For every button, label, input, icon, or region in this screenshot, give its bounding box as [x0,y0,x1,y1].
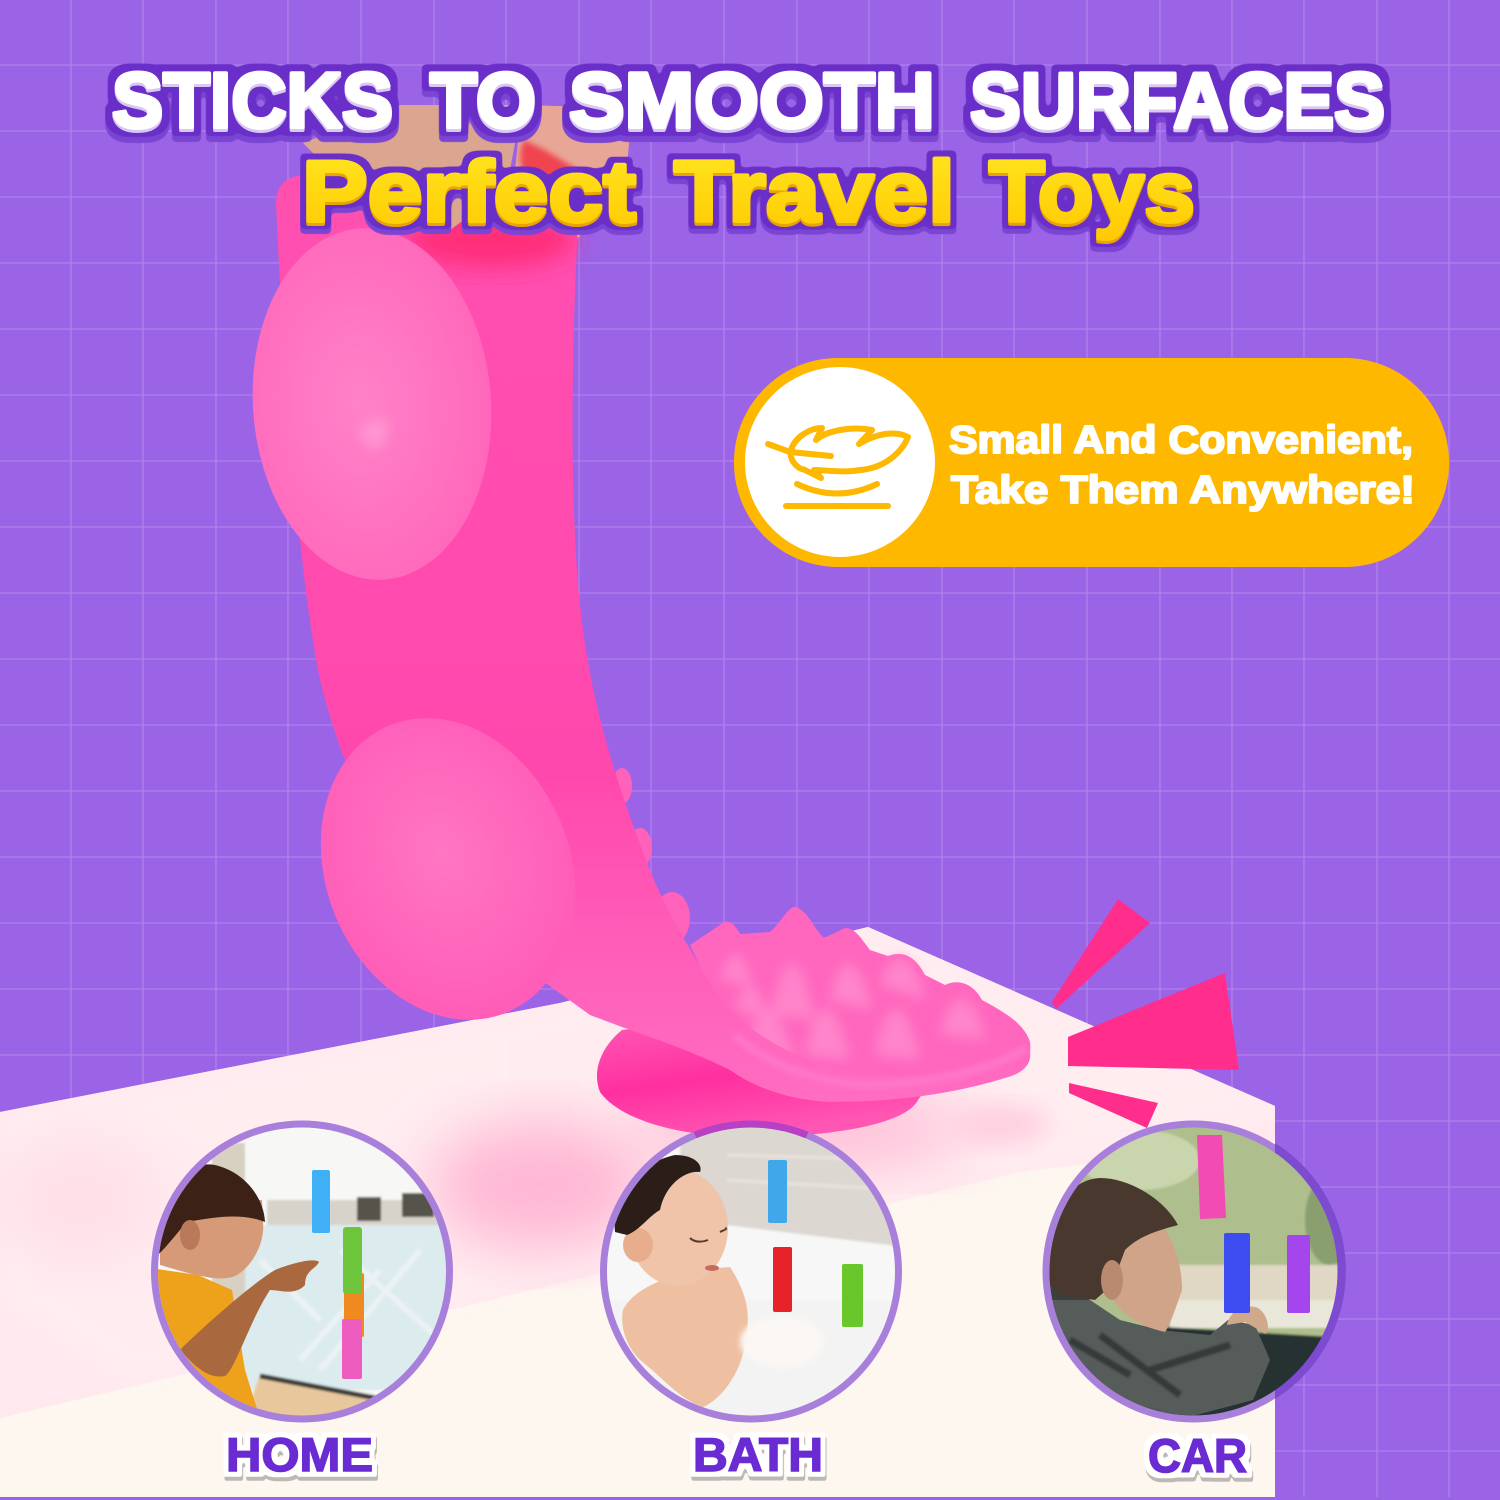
curved silicone strip [276,175,1030,1102]
finger holding the toy [303,105,630,238]
mini toys: pink blue purple [1197,1135,1310,1313]
title line one: SURFACES [970,56,1385,144]
burst accent marks [1052,899,1239,1128]
mini toys: blue green orange pink [312,1170,364,1379]
label: bath: BATH [693,1428,823,1481]
photo circle: bath [600,1120,905,1425]
pink cup overlapping bath circle border [695,1124,807,1135]
pink sensory suction toy [241,105,1030,1137]
title line one [112,56,1385,144]
label: car: CAR [1148,1429,1247,1482]
photo circle: home [150,1120,457,1430]
boy in car seat [1045,1178,1270,1430]
callout: small and convenient [734,358,1449,567]
callout text: Take Them Anywhere! [951,469,1415,512]
baby in bath [614,1155,748,1407]
callout text [949,419,1415,512]
small bumps behind strip [612,768,690,944]
title line one: SMOOTH [569,56,935,144]
deep pink shadow under finger [405,212,575,268]
callout text: Small And Convenient, [949,419,1413,462]
title line two [302,144,1195,240]
lower suction cup [277,680,619,1058]
icon: feather [745,367,935,557]
title line two: Travel [674,144,955,240]
strip front lip highlight [734,1035,1026,1085]
toy base suction cup [597,1020,925,1137]
photo circle: car [1040,1120,1355,1430]
title line one: TO [430,56,536,144]
label: home: HOME [226,1428,373,1481]
title line two: Toys [989,144,1195,240]
white table surface with pink reflection [0,900,1300,1500]
mini toys: blue red green [768,1160,863,1327]
textured pad with bumps [690,907,1030,1095]
title line one: STICKS [112,56,393,144]
boy pointing [158,1164,319,1408]
upper suction cup [241,220,503,588]
title line two: Perfect [302,144,636,240]
bottom edge strip [0,1497,1500,1500]
